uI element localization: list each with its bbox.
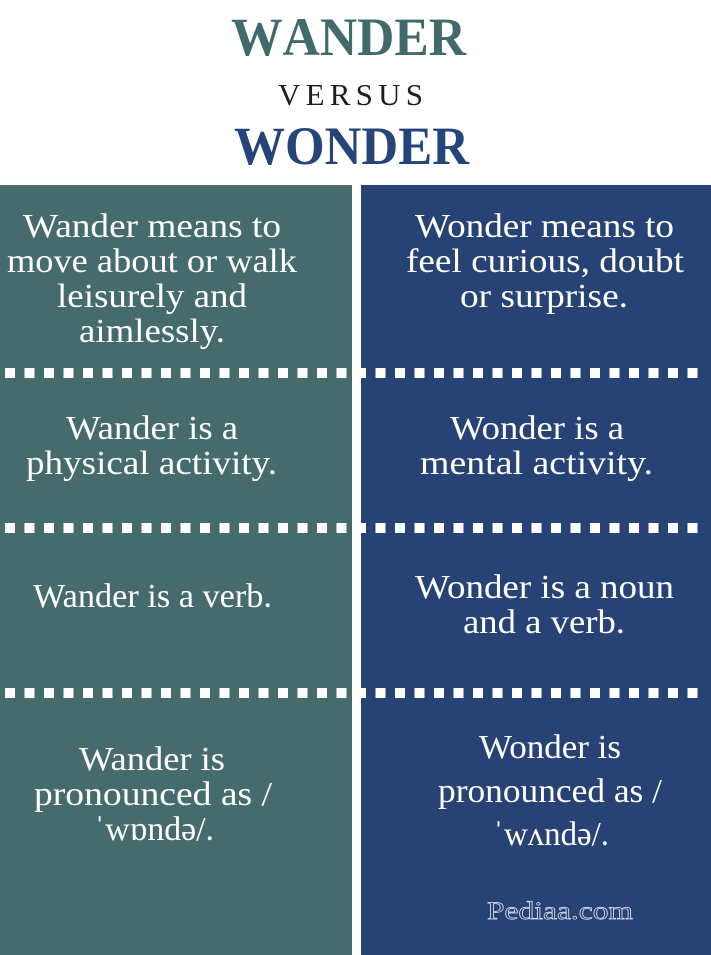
panel: wonder column (361, 185, 711, 955)
text: wander part of speech: Wander is a verb. (33, 578, 272, 615)
text: wonder part of speech: and a verb. (463, 604, 625, 641)
text: wonder pronunciation: ˈwʌndə/. (493, 816, 609, 853)
text: wander meaning: aimlessly. (79, 313, 225, 350)
text: wonder pronunciation: Wonder is (479, 729, 621, 766)
heading: Wonder: WONDER (234, 116, 470, 176)
text: wander meaning: leisurely and (57, 278, 247, 315)
text: wonder activity: mental activity. (420, 445, 653, 482)
text: wander pronunciation (34, 741, 273, 848)
text: wonder activity (420, 410, 653, 482)
text: wonder meaning: Wonder means to (415, 208, 674, 245)
text: wonder meaning: or surprise. (460, 278, 628, 315)
text: wonder pronunciation: pronounced as / (438, 773, 663, 810)
text: wander meaning (7, 208, 297, 350)
text: wander activity: physical activity. (26, 445, 277, 482)
text: wander meaning: move about or walk (7, 243, 297, 280)
text: wander meaning: Wander means to (23, 208, 281, 245)
text: wander pronunciation: ˈwɒndə/. (94, 811, 214, 848)
text: wander pronunciation: pronounced as / (34, 776, 273, 813)
heading: Wander: WANDER (231, 7, 467, 67)
logo: Pediaa.com: Pediaa.com (487, 898, 634, 925)
text: wander activity: Wander is a (66, 410, 238, 447)
text: wonder activity: Wonder is a (450, 410, 624, 447)
panel: wander column (0, 185, 352, 955)
title (231, 7, 470, 176)
text: wonder pronunciation (438, 729, 663, 853)
text: wonder meaning: feel curious, doubt (406, 243, 685, 280)
text: wonder part of speech: Wonder is a noun (415, 569, 674, 606)
text: wonder part of speech (415, 569, 674, 641)
text: wonder meaning (406, 208, 685, 315)
text: wander activity (26, 410, 277, 482)
heading: versus: VERSUS (278, 77, 423, 112)
text: wander pronunciation: Wander is (79, 741, 225, 778)
